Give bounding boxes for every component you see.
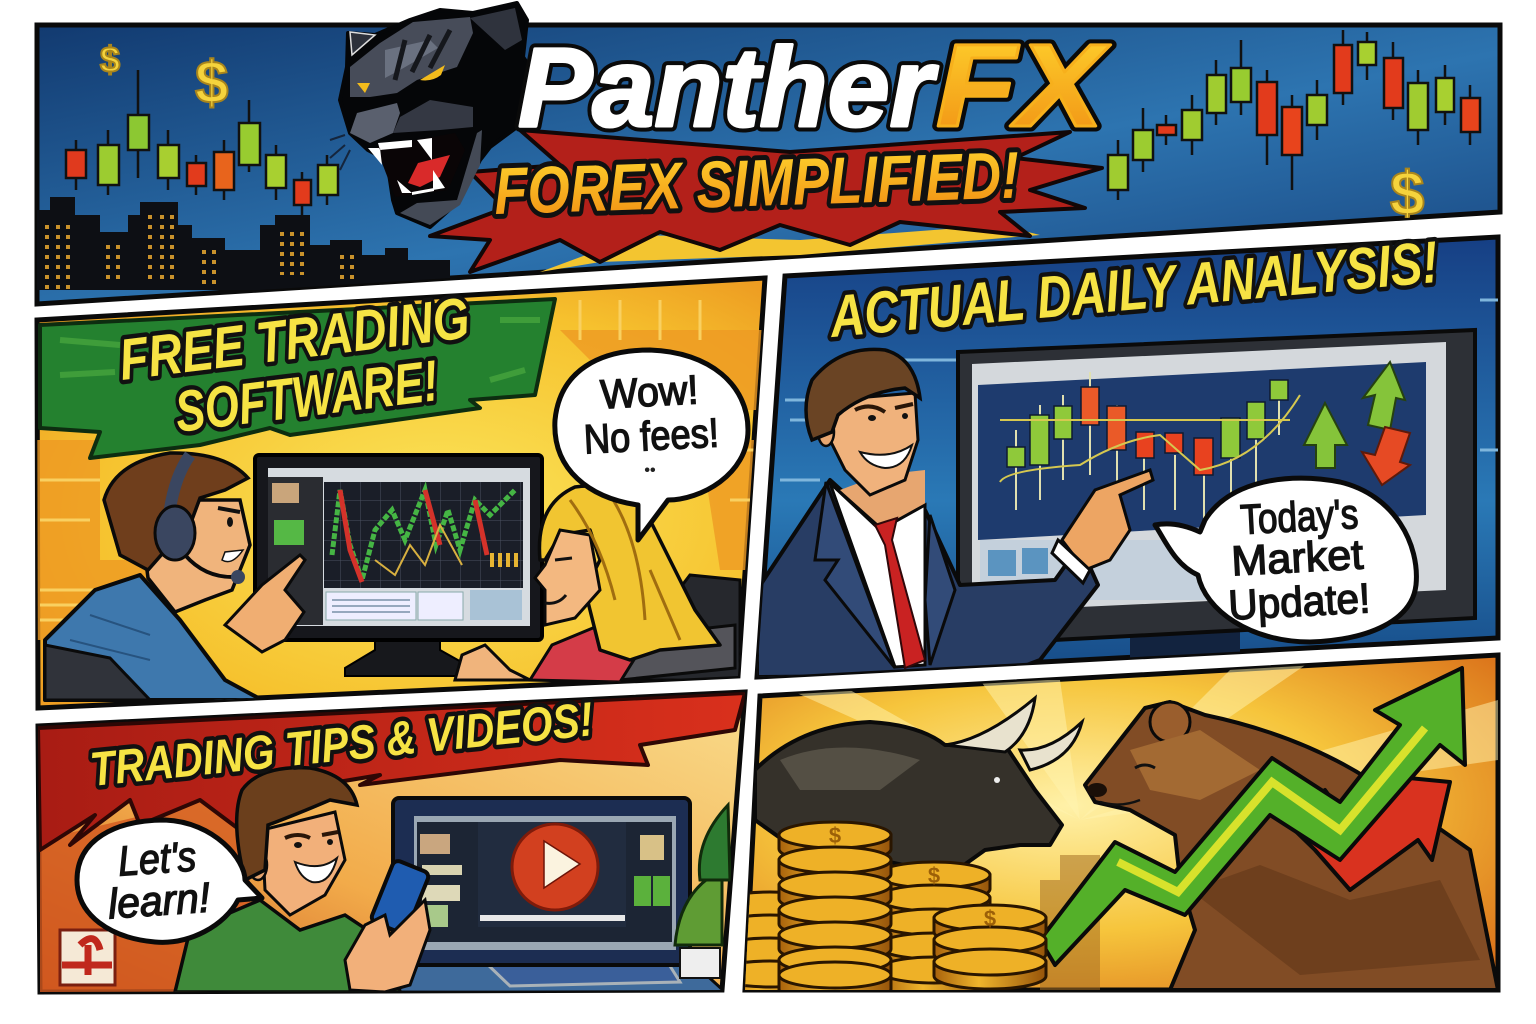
eyes — [420, 65, 445, 80]
pointing hand and cuff — [1062, 470, 1153, 570]
screen candles — [1006, 372, 1289, 518]
panel: bull and bear — [714, 655, 1498, 1002]
speech bubble: market update — [1155, 478, 1416, 642]
speech bubble: wow no fees: •• — [644, 462, 656, 479]
bull — [755, 698, 1082, 875]
distant skyline — [1040, 855, 1100, 990]
coin stacks: $ — [984, 906, 996, 931]
plant — [675, 805, 730, 978]
speech bubble: market update: Today's — [1239, 490, 1359, 543]
panel title: SOFTWARE! — [172, 348, 442, 445]
screen chart — [332, 490, 515, 580]
presenter — [757, 349, 1153, 677]
woman with blonde hair — [455, 486, 740, 682]
open mouth — [376, 133, 465, 197]
right candlestick chart — [1108, 30, 1480, 200]
panel title — [116, 285, 473, 445]
logo wordmark: FX — [936, 20, 1111, 152]
panel title: TRADING TIPS & VIDEOS! — [88, 693, 596, 797]
whiskers — [330, 135, 350, 170]
panel: free trading software — [37, 278, 765, 708]
background orange block — [40, 790, 250, 992]
man with headset — [45, 453, 305, 700]
coin stacks: $ — [928, 863, 940, 888]
arrow icons — [1304, 403, 1347, 468]
play button icon — [512, 824, 598, 910]
left candlestick chart — [66, 70, 338, 215]
hand — [345, 900, 430, 992]
laptop — [390, 798, 725, 992]
icon: panther head — [330, 3, 530, 227]
speech bubble: wow no fees: Wow! — [599, 366, 699, 418]
tagline burst — [430, 130, 1102, 272]
speech bubble: let's learn: Let's — [116, 832, 198, 885]
pointing hand — [225, 555, 305, 652]
chair — [45, 645, 150, 700]
background orange city — [37, 330, 765, 640]
panel: header banner — [37, 25, 1500, 304]
red arrow — [1282, 775, 1450, 890]
background streaks — [780, 300, 1498, 480]
dollar signs: $ — [1390, 160, 1424, 229]
speech bubble: wow no fees: No fees! — [583, 410, 720, 463]
speech bubble: let's learn — [77, 820, 262, 942]
speech bubble: let's learn: learn! — [106, 874, 212, 928]
panel: actual daily analysis — [757, 229, 1498, 677]
sunburst rays — [790, 655, 1498, 820]
lower jaw — [400, 130, 482, 225]
tagline text: FOREX SIMPLIFIED! — [493, 138, 1020, 228]
logo wordmark — [518, 20, 1111, 152]
dollar signs: $ — [100, 39, 120, 80]
coin stacks: $ — [829, 823, 841, 848]
phone — [370, 859, 430, 935]
bear — [1085, 702, 1498, 990]
large monitor — [958, 330, 1475, 665]
fangs — [368, 138, 445, 195]
dollar signs — [100, 39, 1424, 229]
green title banner — [40, 299, 555, 458]
panel title: FREE TRADING — [116, 285, 473, 393]
dollar signs: $ — [195, 49, 228, 116]
forehead — [350, 17, 473, 97]
headset — [168, 455, 190, 525]
red title banner — [38, 693, 745, 850]
speech bubble: market update: Market — [1230, 531, 1365, 584]
logo wordmark: Panther — [518, 25, 938, 150]
monitor — [255, 455, 542, 676]
small logo badge — [60, 930, 115, 985]
speech bubble: wow no fees — [555, 350, 748, 540]
panel: trading tips and videos — [38, 692, 745, 992]
smiling man with phone — [175, 768, 430, 992]
speech bubble: market update: Update! — [1227, 574, 1371, 629]
green rising arrow — [1040, 668, 1465, 965]
logo wordmark: FX — [936, 20, 1111, 152]
coin stacks — [745, 820, 1048, 990]
skyline — [37, 197, 450, 290]
logo wordmark: Panther — [518, 25, 938, 150]
